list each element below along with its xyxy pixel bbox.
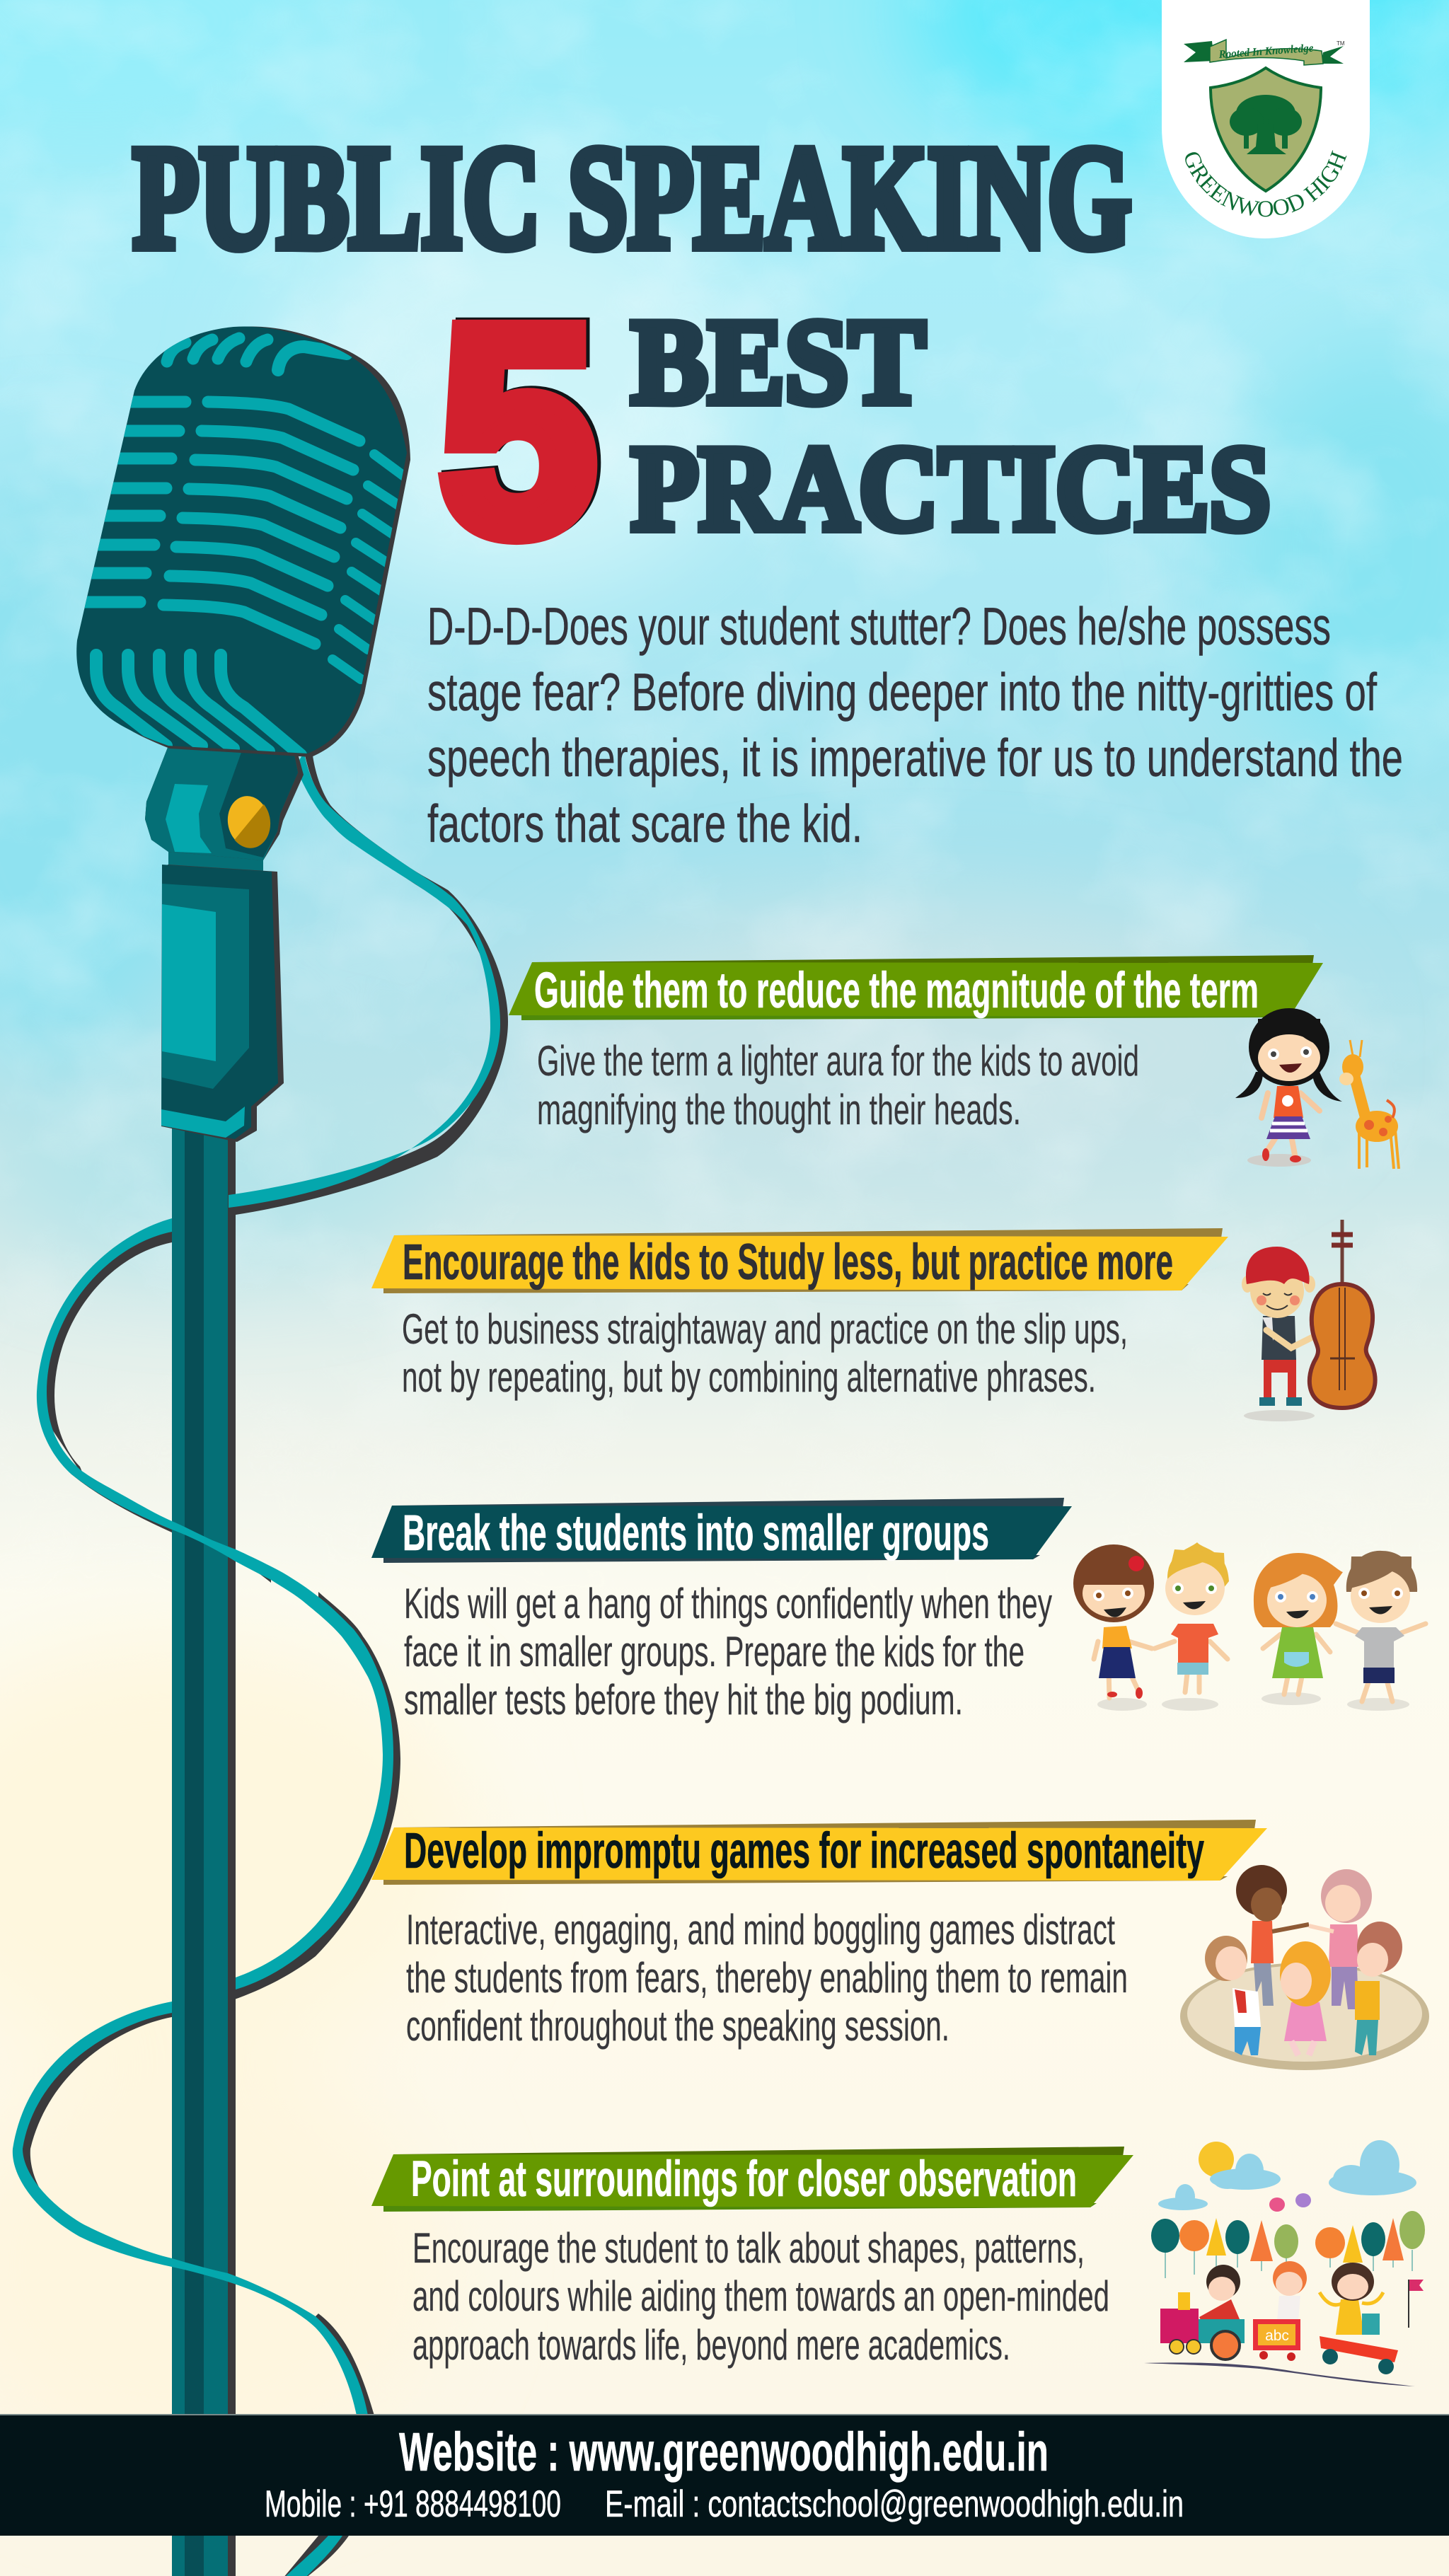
cable loop, upper <box>37 1218 393 1989</box>
banner 5: Point at surroundings for closer observation <box>411 2152 1077 2207</box>
icon: four children <box>1073 1542 1426 1711</box>
big number five: 5 <box>440 266 596 595</box>
body 2 <box>402 1305 1128 1401</box>
logo shield <box>1211 68 1321 191</box>
icon: girl with giraffe <box>1235 1008 1399 1169</box>
mic yoke <box>145 746 304 860</box>
logo ribbon: TM <box>1337 40 1345 47</box>
flag <box>1409 2280 1424 2328</box>
mic head <box>76 326 410 757</box>
body 4 <box>406 1906 1128 2050</box>
mic body <box>161 849 284 1142</box>
boy, back left <box>1236 1865 1309 2006</box>
logo ribbon <box>1184 40 1345 65</box>
screw <box>224 793 274 851</box>
mobile: Mobile : +91 8884498100 <box>265 2483 561 2525</box>
children on train <box>1199 2261 1383 2335</box>
cable shadows behind the stand <box>18 751 508 2576</box>
body 1: Give the term a lighter aura for the kids to avoid <box>537 1037 1139 1085</box>
logo badge <box>1162 0 1370 238</box>
microphone <box>76 326 500 2576</box>
email: E-mail : contactschool@greenwoodhigh.edu.in <box>605 2483 1184 2525</box>
body 5: and colours while aiding them towards an open-minded <box>412 2272 1109 2320</box>
panel: practice 3 <box>371 1498 1426 1723</box>
child 4 <box>1336 1551 1426 1711</box>
panel: practice 4 <box>371 1820 1429 2070</box>
body 4: Interactive, engaging, and mind boggling games distract <box>406 1906 1115 1953</box>
footer bar <box>0 2414 1449 2536</box>
big number five: 5 <box>444 264 599 593</box>
body 3: Kids will get a hang of things confidently when they <box>404 1580 1052 1627</box>
ground line <box>1144 2362 1415 2386</box>
body 5: approach towards life, beyond mere academics. <box>412 2321 1010 2369</box>
body 1 <box>537 1037 1139 1133</box>
child 3 <box>1254 1553 1343 1705</box>
body 3 <box>404 1580 1052 1723</box>
icon: boy with cello <box>1242 1220 1375 1421</box>
birds <box>1269 2193 1311 2212</box>
mic grille <box>82 338 407 755</box>
banner 3: Break the students into smaller groups <box>403 1506 989 1561</box>
body 5: Encourage the student to talk about shapes, patterns, <box>412 2224 1085 2272</box>
icon: toy train scene <box>1144 2140 1425 2386</box>
intro paragraph: factors that scare the kid. <box>427 794 862 853</box>
body 4: the students from fears, thereby enabling them to remain <box>406 1954 1128 2002</box>
body 5 <box>412 2224 1109 2369</box>
stand pole <box>172 1125 236 2576</box>
train <box>1160 2292 1398 2374</box>
panel: practice 5 <box>371 2140 1425 2386</box>
body 2: not by repeating, but by combining alternative phrases. <box>402 1353 1096 1401</box>
banner 3 <box>371 1498 1072 1563</box>
panel: practice 2 <box>371 1220 1375 1421</box>
girl, centre <box>1280 1941 1331 2055</box>
subtitle: best: BEST <box>631 295 925 429</box>
body 3: smaller tests before they hit the big podium. <box>404 1676 963 1723</box>
icon: children playing in a circle <box>1180 1865 1429 2070</box>
child 1 <box>1073 1544 1154 1711</box>
website: Website : www.greenwoodhigh.edu.in <box>399 2422 1049 2483</box>
intro paragraph <box>427 596 1403 853</box>
panel: practice 1 <box>509 955 1399 1169</box>
banner 2 <box>371 1228 1228 1293</box>
logo ribbon: Rooted In Knowledge <box>1218 42 1314 61</box>
child 2 <box>1155 1542 1229 1711</box>
logo tree <box>1230 95 1302 154</box>
sun and clouds <box>1158 2140 1416 2210</box>
train: abc <box>1265 2328 1289 2344</box>
girl, right <box>1355 1922 1402 2055</box>
subtitle: practices: PRACTICES <box>631 422 1271 556</box>
boy, left <box>1205 1936 1261 2055</box>
body 1: magnifying the thought in their heads. <box>537 1086 1021 1133</box>
body 4: confident throughout the speaking session. <box>406 2002 949 2050</box>
trees <box>1151 2211 1425 2278</box>
cable loop, lower <box>13 2002 371 2576</box>
body 3: face it in smaller groups. Prepare the kids for the <box>404 1628 1024 1675</box>
girl, back right <box>1309 1869 1372 2009</box>
banner 5 <box>371 2147 1133 2212</box>
logo wordmark: GREENWOOD HIGH <box>1185 150 1347 216</box>
cable to stand <box>229 752 500 1208</box>
